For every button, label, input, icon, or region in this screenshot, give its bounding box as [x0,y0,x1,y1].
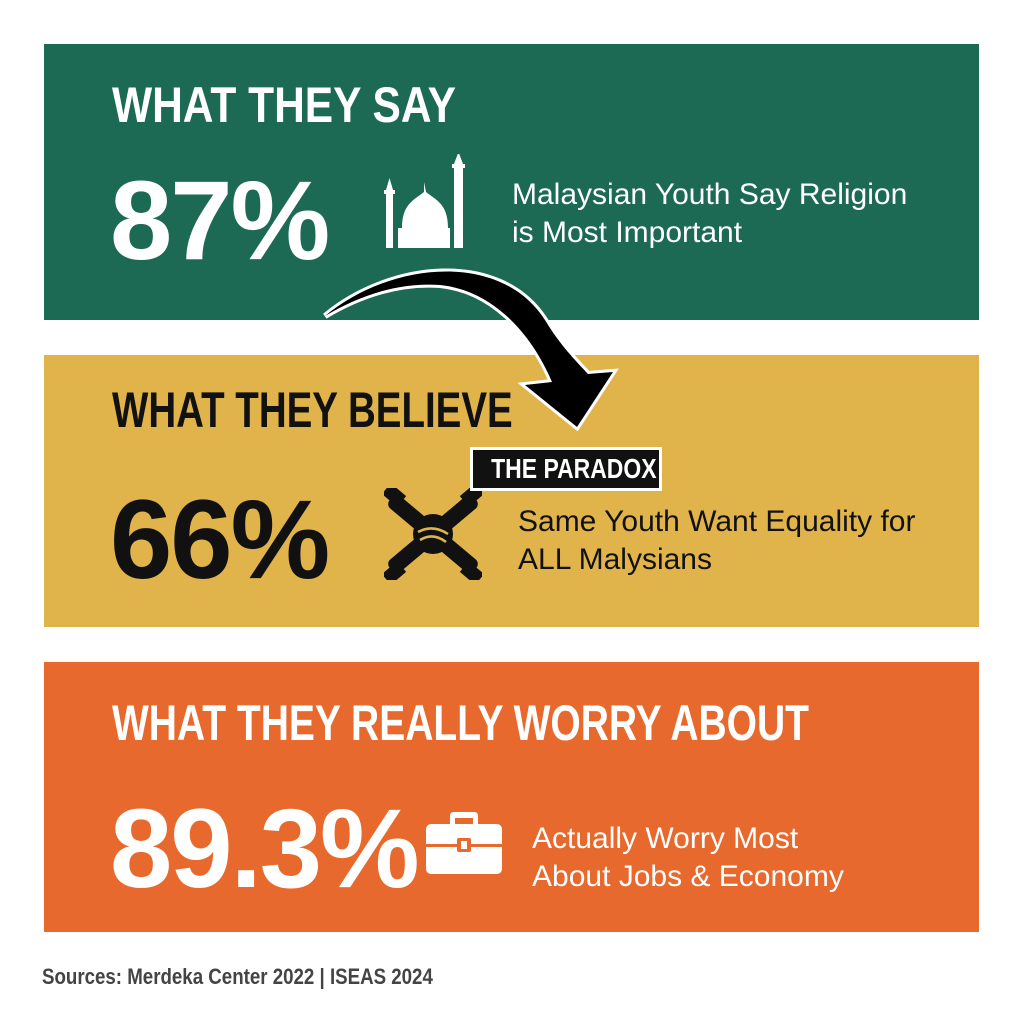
panel: what they really worry about [44,662,979,932]
text: description [518,505,915,576]
text: description: ALL Malysians [518,543,712,576]
stat: 89.3%: 89.3% [110,786,418,911]
footer: sources: Sources: Merdeka Center 2022 | ISEAS 2024 [42,964,433,989]
heading: what they believe: WHAT THEY BELIEVE [112,382,513,438]
heading: what they say: WHAT THEY SAY [112,77,456,133]
label: the paradox: THE PARADOX [491,453,657,484]
icon: briefcase [426,812,502,874]
text: description: Malaysian Youth Say Religion [512,178,907,211]
icon: joined hands [384,488,482,580]
text: description: Actually Worry Most [532,822,798,855]
heading: what they really worry about: WHAT THEY REALLY WORRY ABOUT [112,695,809,751]
text: description: About Jobs & Economy [532,860,844,893]
panel: what they believe [44,355,979,627]
text: description [512,178,907,249]
text: description: Same Youth Want Equality for [518,505,915,538]
label: the paradox [470,447,662,491]
stat: 66%: 66% [110,477,328,602]
stat: 87%: 87% [110,158,328,283]
icon: mosque [384,154,465,248]
panel: what they say [44,44,979,320]
text: description [532,822,844,893]
text: description: is Most Important [512,216,742,249]
